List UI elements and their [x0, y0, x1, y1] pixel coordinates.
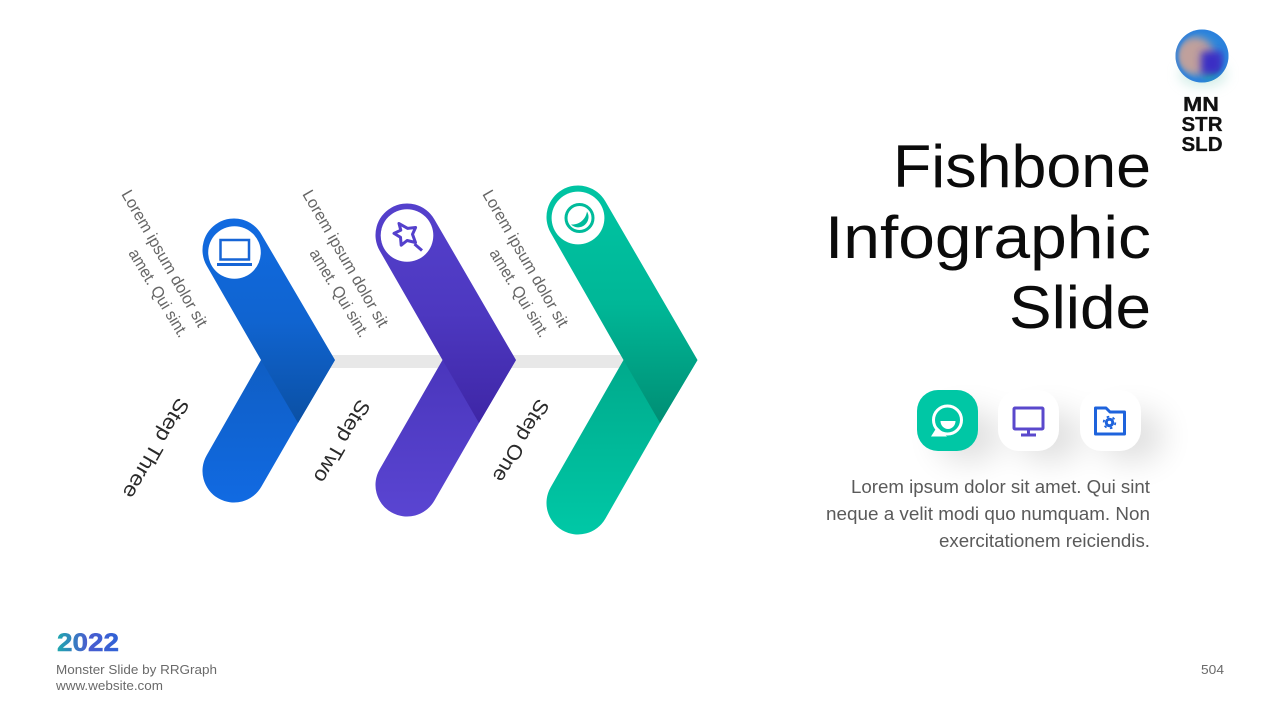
paragraph: exercitationem reiciendis.: [939, 531, 1150, 551]
logo: wordmark: STR: [1182, 114, 1223, 136]
logo: wordmark: SLD: [1182, 134, 1222, 156]
footer: credits: [55, 662, 217, 693]
icon: moon ring: [566, 204, 593, 232]
text: step one description: Lorem ipsum dolor sit: [479, 187, 572, 331]
icon card: folder settings: [1080, 390, 1141, 451]
page number: 504: [1201, 662, 1224, 677]
chevron: step two: [375, 203, 516, 517]
title: Slide: [1009, 274, 1151, 341]
label: step one: Step One: [488, 395, 554, 486]
logo: gradient sphere: [1176, 30, 1228, 87]
footer: year: 2022: [57, 629, 119, 657]
icon card: chat: [917, 390, 978, 451]
title: Fishbone: [893, 133, 1151, 200]
text: step two description: Lorem ipsum dolor sit: [299, 187, 392, 331]
text: step three description: Lorem ipsum dolor sit: [118, 187, 211, 331]
logo: wordmark: MN: [1183, 94, 1219, 116]
chevron: step three: [202, 218, 335, 503]
label: step two: Step Two: [309, 396, 375, 487]
title: [825, 133, 1151, 341]
label: step three: Step Three: [118, 394, 194, 502]
paragraph: [826, 477, 1150, 551]
logo: wordmark: [1182, 94, 1223, 156]
paragraph: Lorem ipsum dolor sit amet. Qui sint: [851, 477, 1150, 497]
title: Infographic: [825, 204, 1151, 271]
icon row shadow: [938, 412, 1162, 460]
icon: magic wand star: [394, 224, 422, 250]
icon: laptop: [217, 240, 252, 264]
paragraph: neque a velit modi quo numquam. Non: [826, 504, 1150, 524]
fishbone spine: [330, 355, 626, 368]
footer: credits: www.website.com: [55, 678, 163, 693]
icon card: monitor: [998, 390, 1059, 451]
text: step three description: amet. Qui sint.: [125, 246, 192, 341]
text: step one description: amet. Qui sint.: [486, 246, 553, 341]
footer: credits: Monster Slide by RRGraph: [56, 662, 217, 677]
text: step two description: amet. Qui sint.: [306, 246, 373, 341]
chevron: step one: [546, 186, 698, 534]
